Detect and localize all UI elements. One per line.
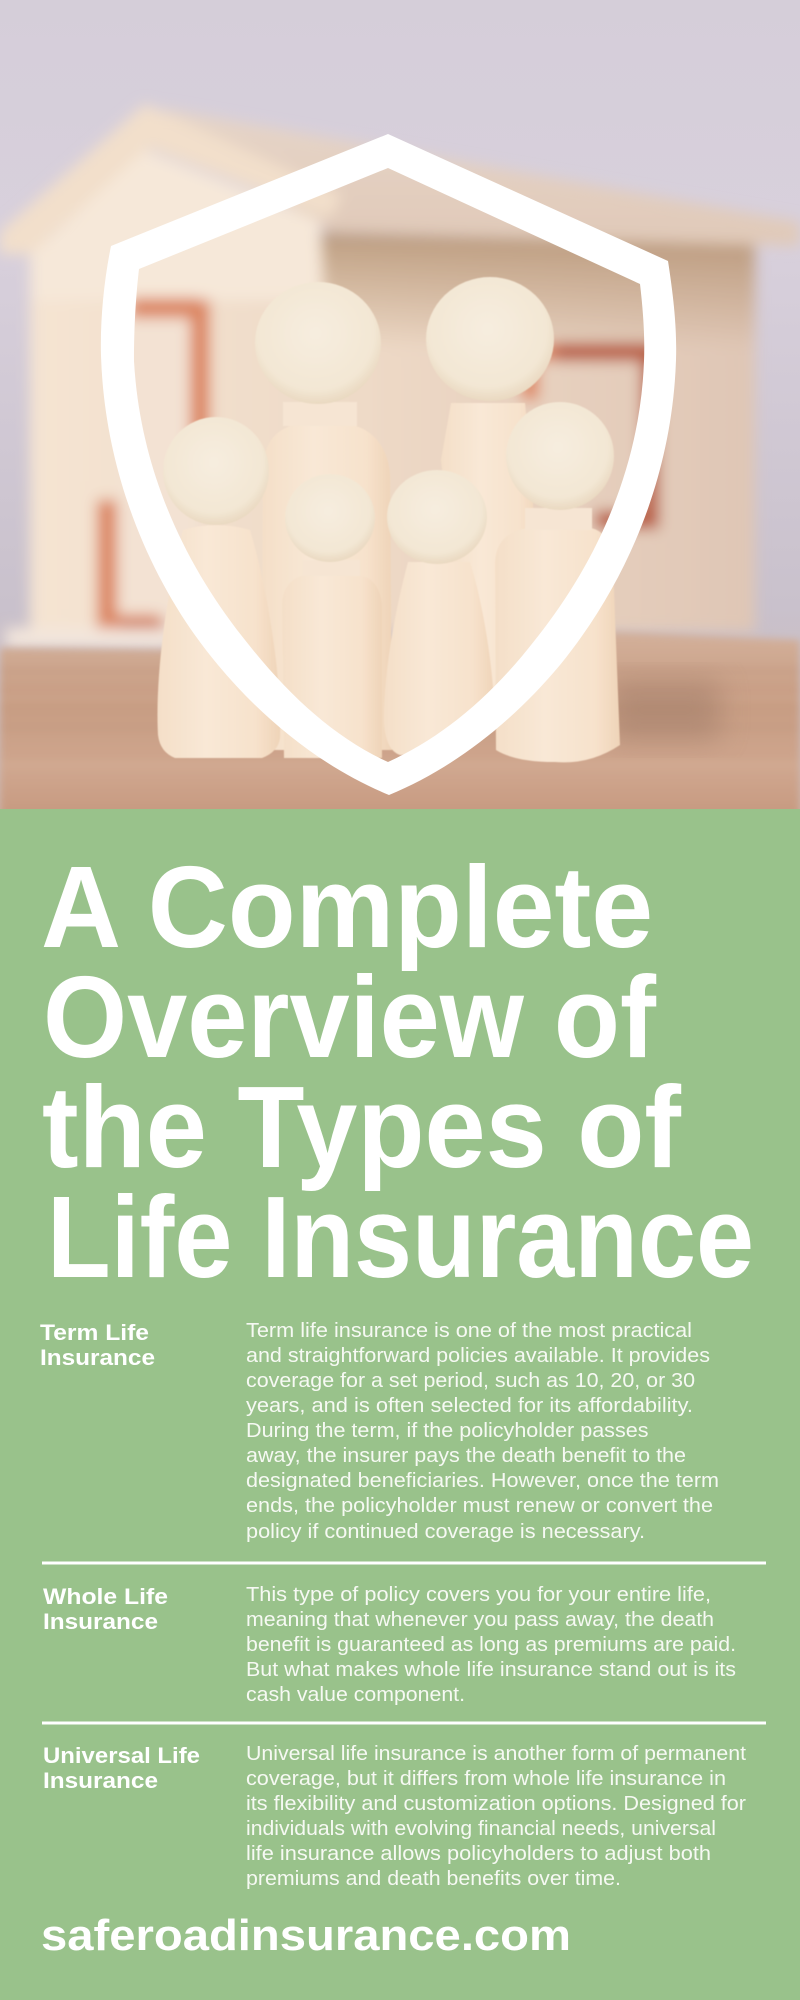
wooden table surface: [0, 632, 800, 830]
figure: center left child: [282, 474, 382, 758]
section: whole life insurance: [43, 1584, 736, 1706]
title: the Types of: [42, 1062, 681, 1192]
text block: term life description: and straightforward policies available. It provides: [246, 1345, 710, 1367]
heading: whole life insurance: [43, 1584, 168, 1634]
text block: term life description: years, and is often selected for its affordability.: [246, 1395, 693, 1417]
text block: universal life description: [246, 1743, 746, 1890]
text block: term life description: policy if continued coverage is necessary.: [246, 1521, 645, 1543]
panel: hero photo of wooden family figures and house: [0, 0, 800, 830]
footer website: saferoadinsurance.com: [41, 1911, 571, 1960]
text block: term life description: During the term, if the policyholder passes: [246, 1420, 648, 1442]
blurred model house: [0, 104, 800, 648]
title: A Complete: [41, 842, 653, 972]
text block: whole life description: cash value component.: [246, 1684, 465, 1706]
text block: universal life description: Universal life insurance is another form of permanent: [246, 1743, 746, 1765]
heading: whole life insurance: Whole Life: [43, 1584, 168, 1609]
text block: term life description: away, the insurer pays the death benefit to the: [246, 1445, 686, 1467]
text block: whole life description: benefit is guaranteed as long as premiums are paid.: [246, 1634, 736, 1656]
heading: universal life insurance: [43, 1743, 200, 1793]
heading: whole life insurance: Insurance: [43, 1609, 158, 1634]
text block: universal life description: life insurance allows policyholders to adjust both: [246, 1843, 711, 1865]
heading: term life insurance: Insurance: [40, 1345, 155, 1370]
heading: term life insurance: Term Life: [40, 1320, 149, 1345]
text block: universal life description: its flexibility and customization options. Designed for: [246, 1793, 746, 1815]
text block: whole life description: [246, 1584, 736, 1706]
title: [41, 842, 754, 1302]
wooden figures family: [157, 277, 620, 762]
text block: universal life description: coverage, but it differs from whole life insurance in: [246, 1768, 726, 1790]
section: universal life insurance: [43, 1743, 746, 1890]
shield outline icon: [101, 134, 676, 795]
heading: universal life insurance: Universal Life: [43, 1743, 200, 1768]
text block: universal life description: individuals with evolving financial needs, universal: [246, 1818, 716, 1840]
figure: right front: [495, 402, 620, 762]
figure: back left adult: [255, 282, 392, 750]
text block: term life description: ends, the policyholder must renew or convert the: [246, 1495, 713, 1517]
figure: center right child: [384, 470, 495, 755]
text block: whole life description: meaning that whenever you pass away, the death: [246, 1609, 714, 1631]
heading: universal life insurance: Insurance: [43, 1768, 158, 1793]
section: term life insurance: [40, 1320, 719, 1543]
title: Overview of: [43, 952, 656, 1082]
text block: term life description: [246, 1320, 719, 1543]
figure shadow on table: [610, 680, 720, 740]
text block: term life description: coverage for a set period, such as 10, 20, or 30: [246, 1370, 695, 1392]
text block: whole life description: This type of policy covers you for your entire life,: [246, 1584, 711, 1606]
figure: back right adult: [426, 277, 554, 720]
text block: whole life description: But what makes whole life insurance stand out is its: [246, 1659, 736, 1681]
photo background wall: [0, 0, 800, 809]
text block: term life description: designated beneficiaries. However, once the term: [246, 1470, 719, 1492]
figure: front left: [157, 417, 280, 758]
text block: term life description: Term life insurance is one of the most practical: [246, 1320, 692, 1342]
text block: universal life description: premiums and death benefits over time.: [246, 1868, 621, 1890]
heading: term life insurance: [40, 1320, 155, 1370]
